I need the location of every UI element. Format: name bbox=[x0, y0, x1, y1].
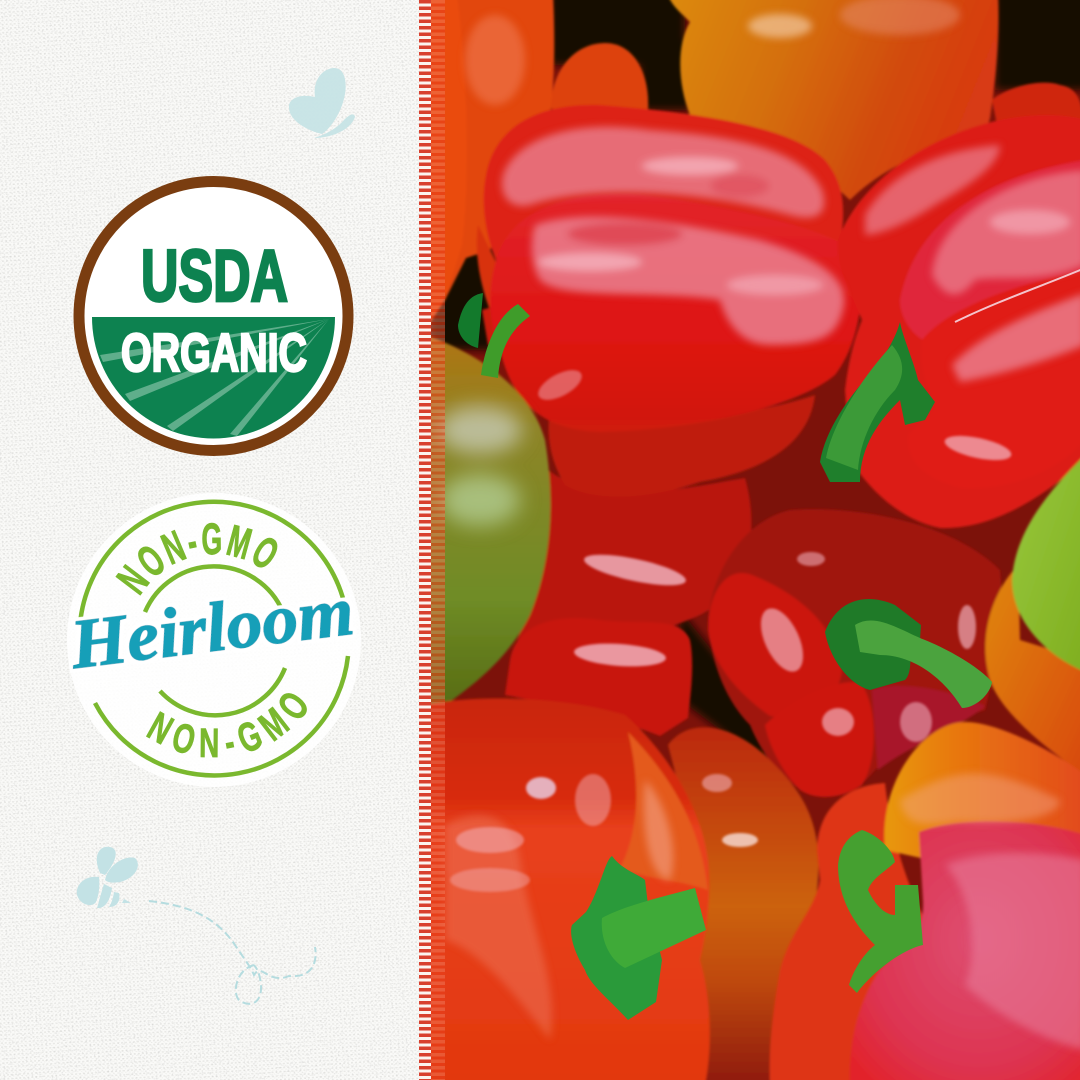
photo: red bell peppers bbox=[425, 0, 1080, 1080]
badge green field bbox=[92, 317, 335, 438]
icon: butterfly bbox=[289, 68, 355, 138]
pepper: main red upper lobe bbox=[484, 105, 843, 270]
icon: bee with dashed flight trail bbox=[77, 847, 316, 1004]
pepper: bottom right orange top bbox=[884, 722, 1080, 860]
flight trail bbox=[149, 901, 316, 1004]
pepper: olive green left bbox=[425, 335, 550, 712]
small red behind stem bbox=[481, 306, 496, 346]
pepper: bottom left right lobe bbox=[620, 732, 708, 890]
stem: center pepper bbox=[825, 599, 992, 708]
pepper: bottom right pink front bbox=[850, 821, 1080, 1080]
stems bbox=[458, 293, 992, 1020]
badge text: USDA: USDA bbox=[141, 236, 288, 317]
pepper: center red with stem bbox=[708, 509, 1001, 796]
stem: bottom left pepper bbox=[571, 856, 706, 1020]
badge text: NON-GMO bottom: NON-GMO bbox=[146, 693, 307, 758]
badge: Heirloom Non-GMO bbox=[66, 493, 361, 787]
stem: right pepper bbox=[820, 322, 935, 482]
pepper highlights bbox=[438, 0, 1080, 1050]
stem: main pepper bbox=[481, 304, 530, 378]
pepper: rear center lower lobe bbox=[505, 618, 692, 736]
panel: linen background bbox=[0, 0, 420, 1080]
pepper: red top right bbox=[991, 80, 1080, 122]
pepper: bottom right rear bbox=[770, 783, 925, 1080]
pepper: bottom left red bbox=[425, 698, 710, 1080]
pepper: orange right bbox=[985, 565, 1080, 775]
pepper: dark red rear center upper bbox=[515, 470, 751, 650]
pepper: right front lower bbox=[922, 271, 1080, 346]
badge text: NON-GMO top: NON-GMO bbox=[115, 522, 278, 596]
pepper: main red lower base bbox=[549, 395, 815, 497]
pepper: middle orange-red lower bbox=[668, 727, 819, 1080]
stem: bottom right pepper bbox=[838, 830, 923, 993]
pepper: main red lower body bbox=[490, 194, 861, 432]
decorative stripe band bbox=[419, 0, 445, 1080]
badge field rays bbox=[100, 319, 329, 436]
pepper: right large red back bbox=[838, 115, 1080, 528]
badge outer ring arcs bbox=[80, 502, 348, 775]
small green leaf bbox=[458, 293, 483, 348]
badge text: Heirloom script: Heirloom bbox=[66, 573, 358, 684]
pepper: right front upper bbox=[900, 160, 1080, 345]
badge: USDA Organic bbox=[79, 182, 348, 450]
bee bbox=[77, 847, 138, 908]
badge text: ORGANIC: ORGANIC bbox=[121, 323, 307, 383]
dark gaps between peppers bbox=[431, 0, 1080, 770]
pepper: orange top center bbox=[668, 0, 998, 200]
pepper: left sliver behind main bbox=[476, 228, 498, 310]
pepper: orange left top bbox=[425, 0, 648, 330]
pepper: green right bbox=[1012, 455, 1080, 672]
